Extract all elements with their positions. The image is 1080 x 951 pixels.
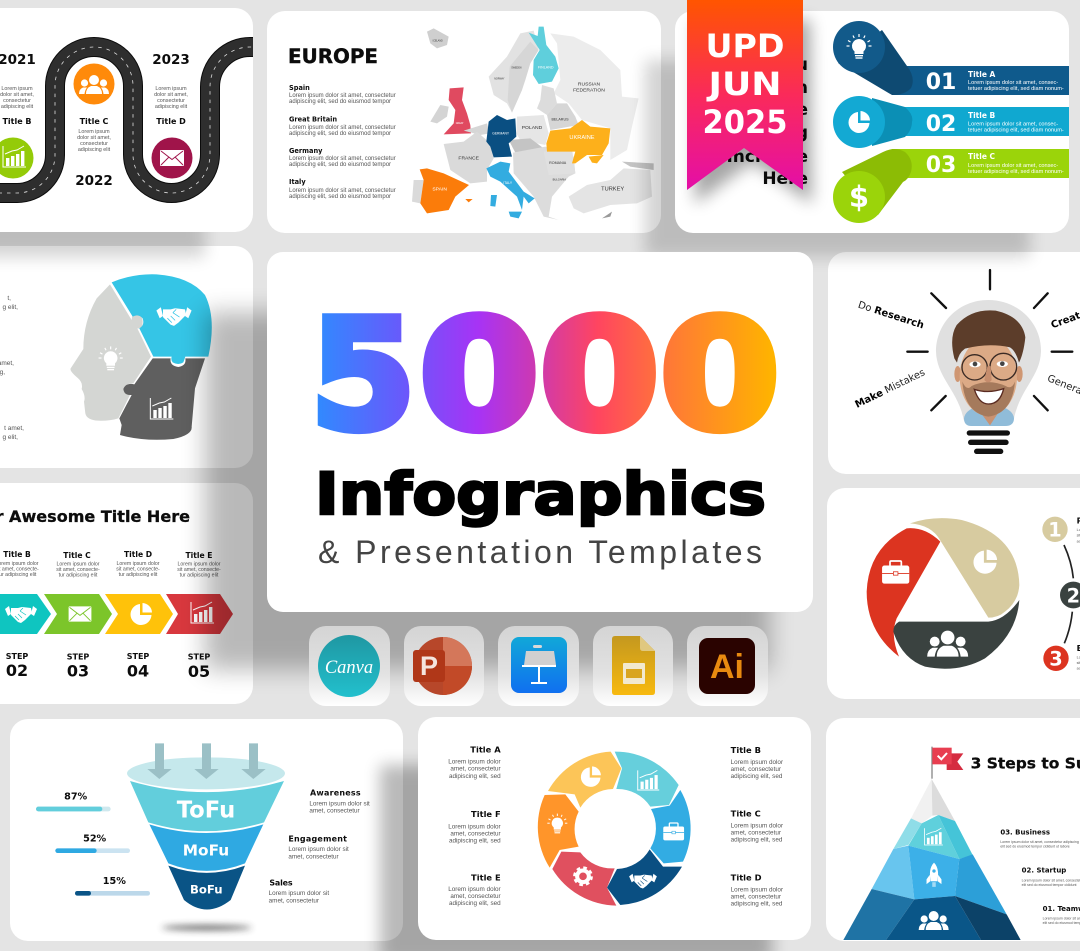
- funnel labels: Lorem ipsum dolor sit: [269, 890, 329, 897]
- cycle labels left: Title A: [470, 744, 501, 754]
- road labels: Title C: [80, 117, 109, 126]
- funnel chart: BoFu: [190, 883, 223, 897]
- step numbers: 05: [188, 662, 210, 681]
- road labels: Title D: [156, 117, 186, 126]
- cycle labels left: Lorem ipsum dolor: [448, 886, 501, 893]
- funnel labels: Lorem ipsum dolor sit: [288, 846, 349, 853]
- pill row 01: tetuer adipiscing elit, sed diam nonum-: [968, 86, 1064, 92]
- head text fragments: t amet,: [4, 425, 24, 432]
- europe map: FRANCE: [458, 156, 480, 162]
- pill row 03: 03: [926, 153, 956, 178]
- country list: Lorem ipsum dolor sit amet, consectetur: [289, 156, 396, 162]
- icon: Adobe Illustrator: Ai: [710, 648, 744, 686]
- europe map: SWEDEN: [511, 67, 522, 69]
- road labels: 2022: [75, 173, 113, 189]
- big number 5000: 5: [310, 287, 416, 464]
- cycle labels right: amet, consectetur: [731, 893, 781, 900]
- arrow chevrons: [0, 594, 233, 634]
- funnel chart: [127, 743, 285, 930]
- pill row 03: Lorem ipsum dolor sit amet, consec-: [968, 163, 1058, 169]
- europe map: GREAT: [456, 122, 464, 125]
- three part circle: [867, 517, 1080, 671]
- panel: triangle cycle: [827, 488, 1080, 699]
- step columns text: Title B: [3, 550, 31, 559]
- europe map: BULGARIA: [553, 178, 566, 182]
- head text fragments: g elit,: [2, 434, 18, 441]
- panel: centre title card: [267, 252, 813, 612]
- cycle labels right: adipiscing elit, sed: [731, 900, 783, 907]
- country list: adipiscing elit, sed do eiusmod tempor: [289, 131, 391, 137]
- flag: [931, 747, 963, 779]
- country list: adipiscing elit, sed do eiusmod tempor: [289, 162, 391, 168]
- cycle labels right: amet, consectetur: [731, 830, 781, 837]
- icon: Canva: Canva: [325, 658, 373, 678]
- road labels: consectetur: [157, 98, 185, 104]
- funnel labels: Lorem ipsum dolor sit: [309, 800, 370, 807]
- step columns text: sit amet, consecte-: [177, 567, 221, 573]
- europe map: ICELAND: [433, 39, 443, 42]
- panel: light bulb portrait: [828, 252, 1080, 474]
- road labels: Title B: [2, 117, 32, 126]
- road labels: [0, 52, 190, 189]
- step columns text: Title E: [186, 551, 212, 560]
- europe map: GERMANY: [492, 132, 510, 136]
- country list: Lorem ipsum dolor sit amet, consectetur: [289, 188, 396, 194]
- step numbers: 04: [127, 662, 149, 680]
- country list: Spain: [289, 84, 310, 92]
- step numbers: STEP: [188, 652, 210, 662]
- road labels: 2023: [152, 52, 190, 68]
- progress bars: 52%: [83, 833, 107, 844]
- numbered steps: 2: [1067, 584, 1080, 607]
- funnel labels: Engagement: [288, 835, 347, 844]
- cycle labels right: adipiscing elit, sed: [731, 837, 783, 844]
- step columns text: Title C: [63, 551, 91, 560]
- ribbon badge: UPD: [706, 27, 784, 65]
- hidden heading behind ribbon: Increase: [726, 147, 808, 167]
- pill row 02: Title B: [968, 111, 996, 120]
- pill row 01: [833, 21, 1069, 95]
- cycle labels right: [731, 745, 783, 907]
- cycle labels left: adipiscing elit, sed: [449, 900, 501, 907]
- subtitle: & Presentation Templates: [318, 534, 762, 570]
- mountain labels: elit sed do eiusmod tempor cididunt ut labore: [1000, 845, 1070, 849]
- country list: Lorem ipsum dolor sit amet, consectetur: [289, 125, 396, 131]
- funnel labels: Sales: [269, 879, 293, 888]
- big number 5000: 000: [419, 287, 780, 464]
- step columns text: Lorem ipsum dolor: [57, 562, 100, 568]
- funnel chart: MoFu: [183, 842, 229, 860]
- cycle labels right: amet, consectetur: [731, 766, 781, 773]
- mountain labels: Lorem ipsum dolor sit amet, consectetur adipiscing: [1000, 840, 1079, 844]
- pill row 02: [833, 96, 1069, 148]
- panel: funnel: [10, 719, 403, 941]
- head text fragments: t,: [7, 295, 11, 302]
- pill row 03: Title C: [968, 152, 996, 161]
- mountain labels: 03. Business: [1000, 828, 1050, 836]
- europe heading: EUROPE: [288, 45, 378, 68]
- road labels: Lorem ipsum: [155, 86, 187, 92]
- icon: PowerPoint: [404, 626, 484, 706]
- cycle labels right: Title B: [731, 745, 761, 755]
- big number 5000: [310, 287, 780, 464]
- hidden heading behind ribbon: Can: [772, 78, 808, 98]
- funnel labels: amet, consectetur: [269, 898, 319, 905]
- step columns text: tur adipiscing elit: [180, 572, 219, 578]
- step numbers: 03: [67, 662, 89, 680]
- europe map: NORWAY: [494, 78, 505, 81]
- road labels: Lorem ipsum: [1, 86, 33, 92]
- europe map: FINLAND: [538, 65, 554, 69]
- head illustration: [70, 274, 212, 440]
- step columns text: Title D: [124, 550, 152, 559]
- road: [0, 47, 253, 193]
- cycle labels left: Title E: [471, 873, 501, 883]
- europe map: [412, 27, 654, 220]
- icon: Canva: [309, 626, 390, 706]
- pill row 02: tetuer adipiscing elit, sed diam nonum-: [968, 128, 1064, 134]
- cycle labels left: amet, consectetur: [450, 830, 501, 837]
- panel: road timeline: [0, 8, 253, 232]
- europe map: ROMANIA: [549, 161, 567, 165]
- step columns text: tur adipiscing elit: [119, 572, 158, 578]
- ribbon badge: JUN: [706, 65, 782, 103]
- pill row 03: tetuer adipiscing elit, sed diam nonum-: [968, 169, 1064, 175]
- europe map: TURKEY: [601, 186, 624, 192]
- europe map: ITALY: [503, 181, 513, 185]
- country list: adipiscing elit, sed do eiusmod tempor: [289, 99, 391, 105]
- cycle labels left: [448, 744, 501, 907]
- country list: Italy: [289, 178, 306, 186]
- funnel chart: ToFu: [177, 798, 235, 824]
- pill row 02: Lorem ipsum dolor sit amet, consec-: [968, 122, 1058, 128]
- icon: chart badge: [0, 138, 34, 178]
- portrait: [952, 310, 1025, 426]
- panel: numbered pills with ribbon: [675, 0, 1069, 233]
- europe map: UKRAINE: [569, 135, 595, 141]
- road labels: dolor sit amet,: [154, 92, 188, 98]
- pill row 02: 02: [926, 112, 956, 137]
- europe map: BELARUS: [551, 118, 569, 122]
- road labels: adipiscing elit: [1, 104, 34, 110]
- progress bars: 87%: [64, 791, 88, 802]
- cycle labels right: Title C: [731, 809, 761, 819]
- step columns text: tur adipiscing elit: [59, 572, 98, 578]
- mountain labels: 02. Startup: [1022, 867, 1066, 875]
- icon: Google Slides: [593, 626, 673, 706]
- hidden heading behind ribbon: Here: [762, 169, 808, 189]
- funnel labels: Awareness: [310, 789, 361, 798]
- panel: mountain steps: [826, 718, 1080, 941]
- step numbers: 02: [6, 661, 28, 680]
- country list: Germany: [289, 147, 323, 155]
- europe map: RUSSIAN: [578, 82, 600, 88]
- pill row 01: Lorem ipsum dolor sit amet, consec-: [968, 80, 1058, 86]
- pill row 03: $: [849, 180, 869, 214]
- road labels: adipiscing elit: [155, 104, 188, 110]
- europe map: POLAND: [522, 125, 543, 131]
- pill row 03: [833, 149, 1069, 223]
- title: Infographics: Infographics: [315, 460, 766, 528]
- panel: europe map: [267, 11, 661, 233]
- panel: step arrows: [0, 483, 253, 704]
- icon: Keynote: [498, 626, 579, 706]
- road labels: consectetur: [3, 98, 31, 104]
- mountain labels: elit sed do eiusmod tempor cididunt: [1022, 883, 1077, 887]
- icon: PowerPoint: P: [420, 651, 438, 681]
- step columns text: Lorem ipsum dolor: [178, 562, 221, 568]
- europe map: FEDERATION: [573, 88, 605, 94]
- mountain illustration: [843, 779, 1021, 940]
- cycle labels left: amet, consectetur: [450, 893, 501, 900]
- europe map: SPAIN: [432, 186, 447, 192]
- numbered steps: 1: [1048, 519, 1062, 542]
- cycle labels left: amet, consectetur: [450, 766, 501, 773]
- step numbers: STEP: [6, 652, 28, 661]
- step columns text: sit amet, consecte-: [56, 567, 100, 573]
- icon: people badge: [74, 64, 114, 104]
- road labels: adipiscing elit: [78, 147, 111, 153]
- step numbers: STEP: [127, 652, 149, 661]
- mountain labels: [1000, 828, 1080, 925]
- hidden heading behind ribbon: You: [772, 55, 808, 75]
- bulb illustration: [853, 270, 1080, 451]
- step numbers: [6, 652, 210, 681]
- country list: Lorem ipsum dolor sit amet, consectetur: [289, 93, 396, 99]
- bulb captions: [853, 300, 1080, 411]
- app icon row: [309, 626, 768, 706]
- ribbon badge: [687, 0, 812, 204]
- pill row 01: Title A: [968, 70, 996, 79]
- step columns text: sit amet, consecte-: [116, 566, 160, 572]
- cycle labels right: adipiscing elit, sed: [731, 773, 783, 780]
- country list: Great Britain: [289, 116, 337, 124]
- bulb captions: Do Research: [856, 300, 925, 331]
- numbered steps: 3: [1049, 648, 1063, 671]
- head text fragments: [0, 295, 24, 441]
- numbered steps: [1042, 517, 1080, 671]
- funnel labels: amet, consectetur: [288, 854, 339, 861]
- country list: adipiscing elit, sed do eiusmod tempor: [289, 194, 391, 200]
- ribbon badge: 2025: [702, 103, 788, 141]
- country list: [289, 84, 396, 200]
- road labels: consectetur: [80, 141, 108, 147]
- cycle labels left: Title F: [471, 809, 501, 819]
- step columns text: Lorem ipsum dolor: [117, 561, 160, 567]
- road labels: dolor sit amet,: [0, 92, 34, 98]
- panel: six step cycle: [418, 717, 811, 940]
- hidden heading behind ribbon: Place: [757, 100, 808, 120]
- cycle labels left: adipiscing elit, sed: [449, 773, 501, 780]
- head text fragments: g elit,: [2, 304, 18, 311]
- hidden heading behind ribbon: Big: [777, 123, 808, 143]
- cycle labels right: Lorem ipsum dolor: [731, 823, 783, 830]
- panel: head puzzle: [0, 246, 253, 468]
- step columns text: [0, 550, 221, 578]
- cycle labels right: Lorem ipsum dolor: [731, 759, 783, 766]
- road labels: Lorem ipsum: [78, 129, 110, 135]
- funnel labels: [269, 789, 370, 905]
- road labels: dolor sit amet,: [77, 135, 111, 141]
- cycle diagram: [538, 752, 691, 906]
- hidden heading behind ribbon: [726, 55, 808, 189]
- cycle labels left: Lorem ipsum dolor: [448, 823, 501, 830]
- cycle labels left: Lorem ipsum dolor: [448, 759, 501, 766]
- bulb captions: Make Mistakes: [853, 367, 927, 411]
- icon: Adobe Illustrator: [687, 626, 768, 706]
- cycle labels left: adipiscing elit, sed: [449, 838, 501, 845]
- cycle labels right: Lorem ipsum dolor: [731, 886, 783, 893]
- cycle labels right: Title D: [731, 873, 762, 883]
- progress bars: 15%: [103, 876, 126, 887]
- progress bars: [36, 791, 150, 896]
- icon: mail badge: [152, 138, 192, 178]
- funnel labels: amet, consectetur: [309, 808, 360, 815]
- pill row 01: 01: [926, 70, 956, 95]
- step numbers: STEP: [67, 652, 89, 662]
